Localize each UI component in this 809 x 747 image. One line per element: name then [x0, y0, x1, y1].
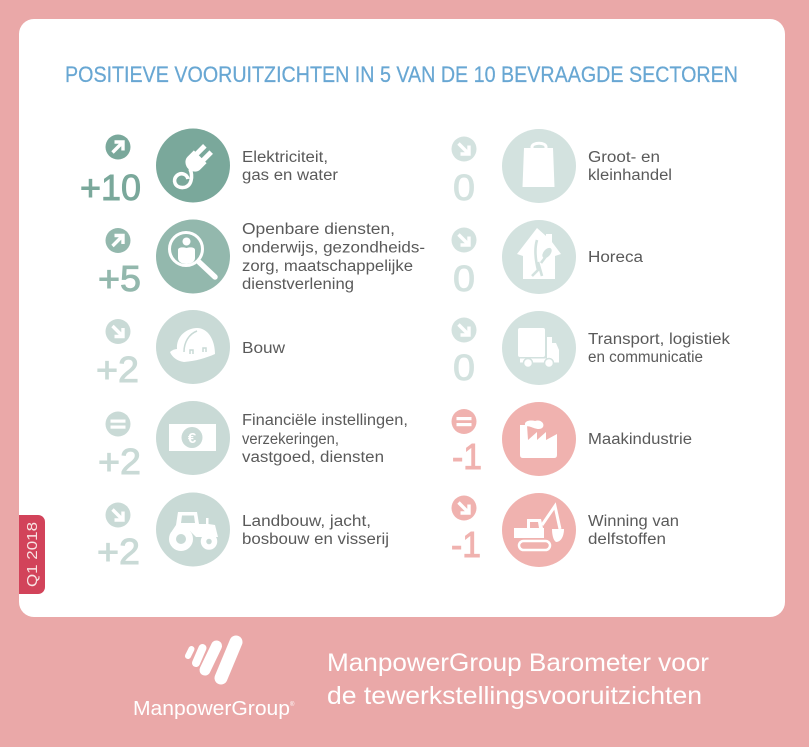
trend arrow up [106, 228, 130, 253]
icon: factory [502, 402, 576, 476]
row: manufacturing [452, 402, 692, 477]
row: electricity: gas en water [242, 167, 338, 184]
icon: house with cutlery [502, 220, 576, 294]
score: +10 [80, 167, 141, 208]
row: mining: delfstoffen [588, 531, 666, 548]
row: transport [452, 311, 730, 388]
footer text [327, 649, 709, 710]
label: Bouw [242, 340, 286, 357]
score: +5 [98, 258, 141, 299]
score: 0 [453, 258, 475, 299]
row: public services: zorg, maatschappelijke [242, 258, 413, 275]
icon: plug [156, 128, 230, 202]
row: financial: verzekeringen, [242, 431, 339, 448]
score: 0 [453, 167, 475, 208]
icon: magnifier person [156, 220, 230, 294]
trend arrow up [106, 134, 130, 160]
label: Maakindustrie [588, 431, 692, 448]
label: Horeca [588, 249, 643, 266]
label: Elektriciteit, [242, 149, 328, 166]
label: Groot- en [588, 149, 660, 166]
label: Winning van [588, 513, 679, 530]
score: 0 [453, 347, 475, 388]
score: +2 [97, 531, 140, 572]
tag: quarter [19, 515, 45, 594]
icon: shopping bag [502, 129, 576, 203]
row: public services: onderwijs, gezondheids- [242, 240, 425, 256]
label: Transport, logistiek [588, 331, 730, 348]
row: financial [98, 401, 408, 482]
row: transport: en communicatie [588, 349, 703, 366]
score: +2 [98, 441, 141, 482]
row: electricity [80, 128, 338, 208]
row: public services: dienstverlening [242, 276, 354, 293]
logo: ManpowerGroup: ManpowerGroup [133, 698, 290, 720]
row: construction [96, 310, 286, 390]
row: agriculture [97, 492, 389, 572]
label: Landbouw, jacht, [242, 513, 371, 530]
row: financial: vastgoed, diensten [242, 449, 384, 466]
trend arrow down [452, 318, 476, 342]
trend equal [106, 412, 130, 436]
label: Openbare diensten, [242, 221, 395, 238]
footer text: de tewerkstellingsvooruitzichten [327, 682, 702, 710]
score: -1 [452, 436, 482, 477]
row: retail: kleinhandel [588, 167, 672, 184]
label: Financiële instellingen, [242, 412, 408, 429]
icon: excavator [502, 493, 576, 567]
panel: sectors [19, 19, 785, 617]
row: retail [452, 129, 672, 208]
trend equal [452, 409, 476, 434]
trend arrow down [452, 496, 476, 520]
score: -1 [451, 524, 481, 565]
logo: ManpowerGroup [133, 642, 295, 720]
icon: banknote [156, 401, 230, 475]
score: +2 [96, 349, 139, 390]
row: agriculture: bosbouw en visserij [242, 531, 389, 548]
row: hospitality [452, 220, 643, 299]
row: mining [451, 493, 679, 567]
row: public services [98, 220, 425, 299]
trend arrow down [452, 136, 476, 162]
icon: truck [502, 311, 576, 385]
icon: banknote: € [188, 430, 197, 447]
trend arrow down [452, 228, 476, 252]
trend arrow down [106, 502, 130, 528]
tag: quarter: Q1 2018 [25, 522, 41, 587]
footer text: ManpowerGroup Barometer voor [327, 649, 709, 677]
logo: ManpowerGroup: ® [290, 701, 295, 708]
icon: helmet [156, 310, 230, 384]
icon: tractor [156, 492, 230, 566]
trend arrow down [106, 319, 130, 344]
